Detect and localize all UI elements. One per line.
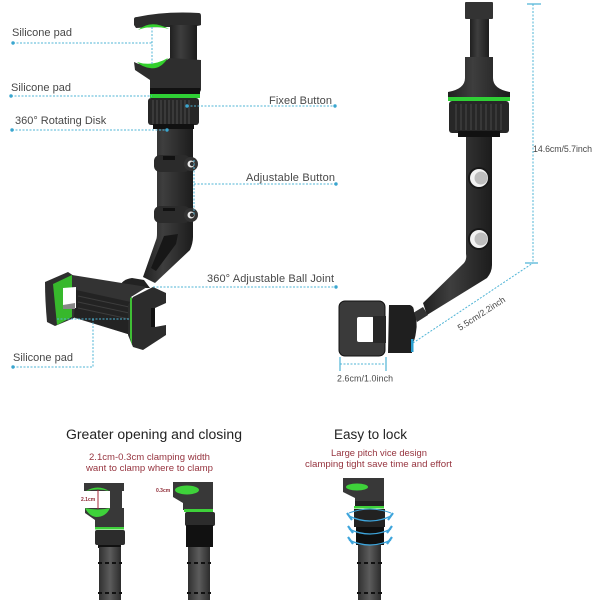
flared body — [448, 57, 510, 97]
callout: fixed button — [185, 95, 337, 108]
callout: 360 adjustable ball joint — [153, 273, 338, 289]
red text: vice design: clamping tight save time and effort — [305, 459, 452, 469]
bent arm — [423, 137, 492, 315]
knob — [449, 101, 509, 137]
right green edge — [130, 297, 132, 345]
lower button — [468, 228, 490, 250]
red text: vice design — [305, 448, 452, 469]
dimension: height — [525, 4, 592, 263]
right block — [128, 287, 166, 350]
left window — [63, 287, 76, 309]
lower silicone pad — [137, 58, 168, 68]
green ring — [448, 97, 510, 101]
upper hinge and button — [154, 155, 198, 172]
lower hinge and button — [154, 206, 198, 223]
ball joint stem — [413, 307, 428, 322]
callout: silicone pad bottom: Silicone pad — [13, 352, 73, 364]
neck — [470, 19, 489, 57]
ball knob — [388, 305, 417, 353]
callout: 360 rotating disk: 360° Rotating Disk — [15, 115, 107, 127]
red text: clamping width: 2.1cm-0.3cm clamping width — [89, 452, 210, 462]
upper clamp arm — [134, 12, 201, 28]
arm inner recess — [151, 234, 178, 271]
red text: vice design: Large pitch vice design — [331, 448, 427, 458]
left green pad — [53, 275, 72, 325]
callout: 0.3cm: 0.3cm — [156, 488, 171, 494]
top cap — [465, 2, 493, 19]
mini product: closed clamp — [173, 482, 215, 600]
dimension: arm length: 5.5cm/2.2inch — [456, 294, 507, 333]
red text: clamping width — [85, 452, 213, 473]
callout: 360 rotating disk — [10, 115, 169, 132]
clamp tray — [72, 275, 147, 335]
mini product: open clamp — [84, 483, 125, 600]
product: side view mount — [339, 2, 510, 356]
dimension: clamp width — [337, 357, 393, 384]
callout: silicone pad bottom — [11, 319, 130, 369]
dimension: arm length — [411, 263, 533, 352]
callout: 2.1cm — [81, 490, 98, 509]
callout: adjustable button — [194, 160, 338, 216]
dimension: height: 14.6cm/5.7inch — [533, 144, 592, 154]
callout: fixed button: Fixed Button — [269, 95, 332, 107]
callout: adjustable button: Adjustable Button — [246, 172, 335, 184]
red text: clamping width: want to clamp where to clamp — [85, 463, 213, 473]
lower clamp jaw — [134, 58, 201, 92]
phone holder clamp — [45, 272, 166, 350]
callout: 360 adjustable ball joint: 360° Adjustable Ball Joint — [207, 273, 334, 285]
left block — [45, 272, 74, 326]
clamp back column — [170, 25, 197, 61]
upper button — [468, 167, 490, 189]
neck collar — [150, 88, 200, 95]
dimension: clamp width: 2.6cm/1.0inch — [337, 374, 393, 384]
callout: silicone pad top — [11, 27, 152, 65]
ball socket — [121, 278, 150, 288]
heading: greater opening and closing: Greater opening and closing — [66, 427, 242, 442]
rotating disk knob — [148, 98, 199, 129]
arm shaft — [143, 129, 193, 283]
callout: 2.1cm: 2.1cm — [81, 497, 96, 503]
end clamp — [339, 301, 386, 356]
product: front view mount — [45, 12, 201, 350]
icon: rotation arrows — [347, 509, 393, 545]
callout: silicone pad top: Silicone pad — [12, 27, 72, 39]
callout: silicone pad middle — [9, 82, 152, 98]
callout: silicone pad middle: Silicone pad — [11, 82, 71, 94]
upper silicone pad — [138, 24, 169, 30]
green ring — [150, 94, 200, 98]
heading: easy to lock: Easy to lock — [334, 427, 407, 442]
mini product: locking mechanism — [343, 478, 385, 600]
